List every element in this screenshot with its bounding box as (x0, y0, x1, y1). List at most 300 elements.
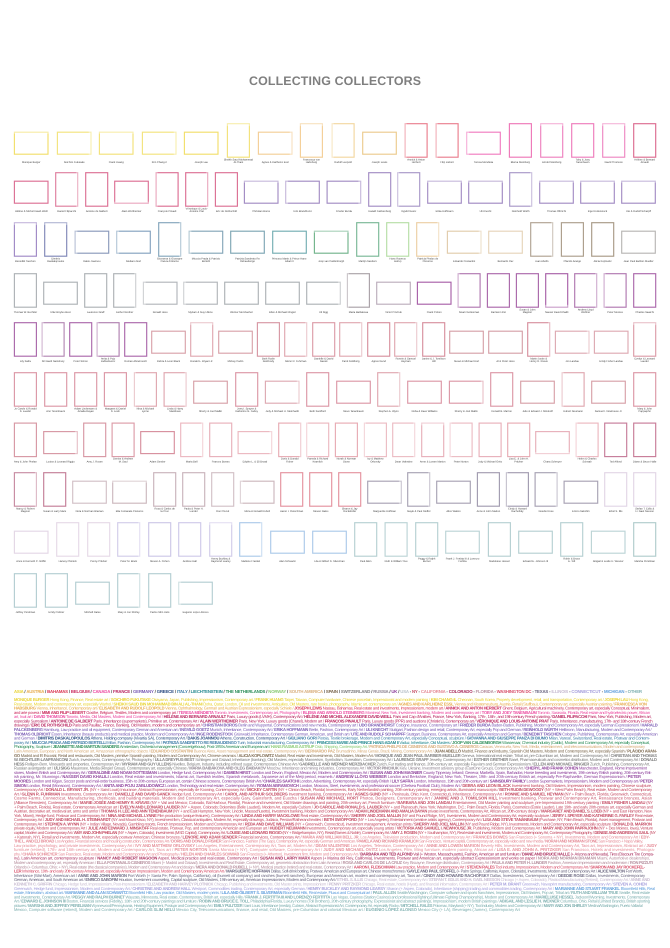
frame: Erika Hoffmann (428, 181, 461, 213)
frame: Thomas W. Bechtler: Thomas W. Bechtler (14, 311, 37, 314)
frame: Evelyn and Leonard Lauder: Evelyn & Leonard (634, 357, 655, 360)
frame: Emily Fisher Landau (594, 331, 628, 363)
frame: Steve Tananbaum (337, 381, 370, 413)
frame: Nora and Norman Braman: Nora & Norman Braman (76, 510, 104, 513)
frame: Susan and Larry Marx (43, 473, 67, 513)
frame: Marsha Perelman (634, 523, 656, 563)
frame: Lily Safra: Lily Safra (20, 360, 31, 363)
row 3 of collector frames (14, 223, 655, 263)
frame: Patrizia Sandretto Re Rebaudengo: Patrizia Sandretto Re (235, 257, 260, 260)
frame: Deedie Rose: Deedie Rose (539, 510, 554, 513)
frame: Peter M. Brant (118, 523, 140, 563)
frame: Susan and John Magnier (516, 274, 538, 314)
frame: Rosa and Carlos de la Cruz: Rosa & Carlos de (155, 507, 175, 510)
frame: Amy and John Phelan (14, 423, 37, 463)
frame: Edward E. Johnson III: Edward E. Johnson III (523, 560, 548, 563)
frame: David Thomson: David Thomson (605, 161, 623, 164)
frame: Panza di Biumo: Giovanna & Giuseppe (157, 257, 183, 260)
frame: Glenn R. Fuhrman: Glenn R. Fuhrman (285, 360, 307, 363)
frame: Norah and Norman Stone: Norah & Norman (337, 458, 357, 461)
row 4 of collector frames (14, 274, 656, 314)
text block: collector directory: Modern and contemporary art, especially American / ELLA FONTANALS-CISNEROS Miami (+ Madrid and Gstaad), Investments and Real Estate, Contemporary art, geometric abstraction from Latin America / ROSA AND CARLOS DE LA CRUZ Key Biscayne, Beverage distribution, Contemporary Art / PAULA AND PETER H. LUNDER Fashion, American Impressionism and modernism / RON PIZZUTI (14, 860, 653, 865)
frame: Ann Tenenbaum: Ann Tenenbaum (46, 410, 65, 413)
text block: collector directory: Orlando (+ Columbus, Ohio; + NY), Real estate (the classical companies), Modern and Contemporary Art and design / MERA AND DONALD RUBELL (+ NY), Medical practice (retired) and real estate, Contemporary Art / AARON I. FLEISCHMAN Law practice, Modern and Contemporary Art / STEVEN RALES Tool industry, Impressionism, Modern and Contemporary Art / SHARON AND JAY ROCKEFEL- (14, 864, 646, 869)
frame: Amy and John Phelan: Amy & John Phelan (14, 460, 37, 463)
frame: Mera and Donald Rubell (240, 481, 274, 513)
frame: Danielle and David Ganek: Ganek (320, 360, 328, 363)
frame: Joseph Lau: Joseph Lau (194, 161, 208, 164)
frame: Nasser David Khalili: Nasser David Khalili (545, 311, 569, 314)
frame: Donald Hess: Donald Hess (153, 311, 168, 314)
text block: collector directory: ish painting, Mr. Munnings / NASSER DAVID KHALILI London, Real estate and investments, Islamic art, Swedish textiles, Spanish metalwork, Japanese art of the Meiji period, enamels / ANDREW LLOYD WEBBER London and Berkshire, England; New York, Theater, 19th- and 20th-century British art, especially Pre-Raphaelite, German Expressionism / PETER (14, 774, 641, 779)
frame: Maria Bell: Maria Bell (186, 460, 198, 463)
frame: Juan Abello: Juan Abelló (535, 260, 549, 263)
frame: Stefan T. Edlis and H. Gael Neeson (634, 473, 656, 513)
frame: Alain Wertheimer (115, 181, 148, 213)
frame: Francois Pinault: François Pinault (158, 210, 177, 213)
frame: Ann Tenenbaum (45, 373, 67, 413)
text block: collector directory: MOORES London and Kilgan, Soccer pools and mail-order business, 15th- to 20th-century European art, certain Chinese screens, Contemporary British Art / CHARLES SAATCHI London, Advertising, Contemporary Art, especially British / LILY SAFRA London, Inheritance, 19th and 20th-century art / SAINSBURY FAMILY London Supermarkets, Impressionism, Modern and Contemporary art / PETER (14, 778, 653, 784)
text block: collector directory: art, Inuit art / DAVID THOMSON Toronto, Media, Old Masters, Modern and Contemporary Art / HÉLÈNE AND BERNARD ARNAULT Paris, Luxury goods (LVMH), Contemporary Art / HÉLÈNE AND MICHEL ALEXANDRE DAVID-WEILL Paris and Cap d'Antibes, France, New York, Banking, 17th-, 18th-, and 19th-century French painting / DANIEL FILIPACCHI Paris, New York, Publishing, Modern art, (14, 714, 652, 719)
frame: Linda and Harry Macklowe (164, 373, 186, 413)
frame: Uli Knecht: Uli Knecht (480, 210, 492, 213)
frame: Ellen and Michael Ringier: Ellen & Michael Ringier (269, 311, 296, 314)
frame: Francesca von Habsburg: Habsburg (306, 161, 318, 164)
frame: Peggy and Ralph Burnet: Peggy & Ralph (418, 557, 436, 560)
frame: Donald Hess (143, 282, 177, 314)
frame: Christian Boros (244, 181, 278, 213)
frame: Denise and Andrew M. Saul: M. Saul (119, 460, 128, 463)
frame: Carol Goldberg (340, 323, 362, 363)
frame: Ted Alfond (605, 423, 627, 463)
frame: Jeannette and Martijn Sanders: Martijn Sanders (359, 260, 377, 263)
frame: Teresa Mendieta (467, 132, 500, 164)
frame: Noam Gottesman: Noam Gottesman (459, 311, 480, 314)
text block: collector directory: Latin American, European, and North American art, Amazonian ethnographic objects / EDUARDO COSTANTINI Buenos Aires, Asset management and real estate, Contemporary Art / BERNARDO PAZ Brumadinho, Minas Gerais, Brazil, Mining, Contemporary Art / JUAN ABELLÓ Madrid, Finance and industry, Spanish Old Masters, Modern and Contemporary Art, especially Spanish / PLÁCIDO ARAN- (14, 748, 658, 754)
frame: Cindy and Howard Rachofsky (506, 473, 528, 513)
frame: Marguerite Hoffman: Marguerite Hoffman (373, 510, 396, 513)
frame: Udo Brandhorst (286, 181, 319, 213)
text block: collector directory: York, Miami), Hedge fund, Postwar and Contemporary Art / NINA AND MICHAEL LYNNE Film production (unique features), Contemporary Art / LINDA AND HARRY MACKLOWE Real estate, Contemporary Art / SHERRY AND JOEL MALLIN (NY and Pound Ridge, NY), Investments, Modern and Contemporary Art, especially sculpture / JERRY I. SPEYER AND KATHERINE G. FARLEY Real estate, (14, 813, 654, 818)
text block: collector directory: (Alliance Bernstein), Contemporary Art / MARIE-JOSÉE AND HENRY R. KRAVIS (NY + Vail and Mexico; Colorado, Bal Harbour, Florida), Finance and investment, Old Master drawings and painting, 20th-century art, French furniture / BARBARA AND JON LANDAU Entertainment, Old Master painting and sculpture, pre-Impressionist 19th-century painting / EMILY FISHER LANDAU (NY (14, 800, 653, 805)
frame: Jeffrey Perelman (14, 574, 36, 614)
frame: Dean Valentine (393, 423, 415, 463)
frame: Lisa E. and John A. Pritzker: Pritzker (514, 460, 523, 463)
frame: Paula and Peter H. Lunder: Paula & Peter H. (184, 507, 204, 510)
text block: collector directory: + Katonah, NY), Retail and investments, Modern Art, especially postwar American; Chinese bronzes / LENORE AND ADAM SENDER Financial services, Contemporary Art / MARIA AND WILLIAM BELL JR. Los Angeles, Television production, Modern and Contemporary Art / FRANCES BOWES San Francisco (+ Sonoma + NY), Investments, Modern and Contemporary Art / EDY- (14, 834, 651, 839)
frame: Nora and Norman Braman (73, 481, 106, 513)
frame: Deedie Rose (535, 473, 557, 513)
frame: Stephen A. Wynn: Stephen A. Wynn (379, 410, 399, 413)
frame: William Mackie and Raymond Learsy (210, 523, 232, 563)
text block: collector directory: furniture (retired), 17th- and 18th-century art, Modern and Contemporary Art, Taos art / PETER NORTON Santa Monica (+ NY), Computer software, Contemporary Art / JUDY AND MICHAEL OVITZ Los Angeles, Film, Ming furniture, modern painting, African art / LISA E. AND JOHN A. PRITZKER San Francisco, Hotels and investments, Photogra- (14, 847, 656, 852)
frame: Louise and Leonard Riggio (44, 432, 77, 463)
frame: Patricia Phelps de Cisneros (417, 223, 439, 263)
frame: Emily Pulitzer: Emily Pulitzer (49, 611, 64, 614)
frame: Margaret and Daniel S. Loeb: S. Loeb (111, 410, 120, 413)
frame: Chara Schreyer: Chara Schreyer (543, 460, 562, 463)
frame: Rudolf Leopold (332, 124, 354, 164)
frame: Ella Fontanals-Cisneros (113, 481, 146, 513)
frame: Jo Carole and Ronald S. Lauder: S. Lauder (20, 410, 31, 413)
frame: Cindy and Howard Rachofsky: Rachofsky (511, 510, 524, 513)
text block: collector directory: Photography, Sculpture / JEANNETTE AND MARTIJN SANDERS Amsterdam, Orchestra management (Concertgebouw), Post-1950s American and European art / HANS RASMUS ASTRUP Oslo, Shipping, Contemporary Art / PATRICIA PHELPS DE CISNEROS AND GUSTAVO A. CISNEROS Caracas, Venezuela, New York, Media, entertainment, and telecommunications, Modern and contemporary (14, 744, 646, 749)
frame: Al and Peter Hess (489, 331, 522, 363)
text block: collector directory: LER Inheritance, 19th- and early 20th-century American art, especially American Impressionism, Modern and Contemporary American Art / MARGUERITE HOFFMAN Dallas, Soft-drink bottling, Postwar, American and European art, Chinese monochromes / GAYLE AND PAUL STOFFEL (+ Palm Springs, California; Aspen, Colorado), Investments, Modern and Contemporary Art / ALICE WALTON Fort Worth, (14, 869, 643, 874)
frame: Eduardo Costantini: Eduardo Costantini (453, 260, 476, 263)
frame: Alice Walton (437, 481, 470, 513)
frame: Miuccia Prada and Patrizio Bertelli: Bertelli (202, 260, 210, 263)
frame: Patricia Phelps de Cisneros: Cisneros (423, 260, 434, 263)
frame: Uli Sigg: Uli Sigg (319, 311, 329, 314)
text block: collector directory: private equity, Modern and Contemporary Art / JULIE AND EDWARD J. MINSKOFF Real estate, Postwar, Pop, and contemporary American and European art / HUBERT NEUMANN Investments, Contemporary art, especially young artists / VICTORIA AND SAMUEL I. NEWHOUSE JR. Publishing, Modern and Contemporary Art / MARY AND JOHN PAPPAJOHN (NY + Des Moines, Iowa), Venture (14, 826, 654, 831)
frame: Benedikt Taschen (14, 223, 36, 263)
frame: Juan Abello (531, 223, 553, 263)
frame: Thomas Olbricht: Thomas Olbricht (547, 210, 566, 213)
frame: Thomas W. Bechtler (14, 274, 37, 314)
frame: Marie-Josee and Henry R. Kravis: Henry R. Kravis (530, 360, 548, 363)
frame: Stephen A. Wynn (378, 373, 400, 413)
frame: Joseph Lewis (363, 132, 396, 164)
frame: Frances Bowes: Frances Bowes (212, 460, 230, 463)
frame: Sherry and Joel Mallin (449, 381, 483, 413)
frame: Ute and Rudolf Scharpff (622, 181, 655, 213)
frame: Nancy and Robert Magoon: Nancy & Robert (16, 507, 35, 510)
frame: Mary and John Pappajohn (634, 373, 656, 413)
frame: Adam Lindemann and Amalia Dayan: Amalia Dayan (78, 410, 94, 413)
frame: Jean Paul Barbier-Mueller (622, 231, 655, 263)
frame: Cindy and Howard Rachofsky: Cindy & Howard (508, 507, 527, 510)
frame: Harald Falckenberg (368, 173, 392, 213)
frame: Antoine de Galbert (86, 173, 108, 213)
frame: Jeannette and Martijn Sanders (357, 223, 379, 263)
frame: Donald B. Marron (491, 373, 513, 413)
frame: Myriam and Guy Ullens: Myriam & Guy Ullens (188, 311, 213, 314)
text block: collector directory: Art / EDWARD E. JOHNSON III Boston, Financial services (Fidelity), 18th- and 20th-century paintings and furniture / ROBIN AND BRUCE E. TOLL Philadelphia/Florida, Luxury homes (Toll Brothers), 20th-century photography, Expressionist and abstract paintings, Impressionism, modern British paintings / ABIGAIL AND LESLIE H. WEXNER Columbus, Ohio, Retail (Limited Brands), British sporting (14, 899, 651, 904)
frame: Amy J. Rosen (84, 423, 106, 463)
frame: Judy and Michael Ovitz (478, 423, 503, 463)
frame: Debra and Leon Black: Debra & Leon Black (157, 360, 181, 363)
frame: Dakis Joannou: Dakis Joannou (83, 260, 101, 263)
frame: Uli Sigg (307, 282, 340, 314)
frame: Blema Steinberg: Blema Steinberg (511, 161, 531, 164)
frame: Lila and Gilbert S. Silverman: Lila & Gilbert S. Silverman (314, 560, 345, 563)
frame: Penny Pritzker: Penny Pritzker (90, 560, 107, 563)
frame: Blema Steinberg (509, 124, 531, 164)
frame: Jerry I. Speyer and Katherine G. Farley: Katherine G. Farley (235, 410, 259, 413)
frame: Marie-Josee and Henry R. Kravis: Marie-Josée & (530, 357, 547, 360)
frame: Peter Norton (450, 423, 472, 463)
frame: Nancy and Robert Magoon: Magoon (21, 510, 31, 513)
frame: Alan Schwartz: Alan Schwartz (279, 560, 296, 563)
frame: Veronique and Louis-Antoine Prat: Antoine Prat (190, 210, 204, 213)
frame: Peggy and Ralph Burnet: Burnet (423, 560, 431, 563)
frame: Alain Wertheimer: Alain Wertheimer (122, 210, 142, 213)
frame: Princess Marie and Prince Hans-Adam II (272, 231, 307, 263)
frame: Ella Fontanals-Cisneros: Ella Fontanals-Cisneros (116, 510, 144, 513)
frame: Mitchell Rales: Mitchell Rales (84, 611, 101, 614)
frame: Judy and Michael Ovitz: Judy & Michael Ovitz (478, 460, 503, 463)
frame: Anne and Lowen Marion (420, 423, 446, 463)
frame: Peter Moores: Peter Moores (607, 311, 624, 314)
text block: collector directory: FALCKENBERG Hamburg, Law practice and oil equipment, Contemporary German and American art / INGVILD GOETZ Munich, Inheritance, Contemporary Art / ERIKA HOFFMANN Berlin, Fashion, Contemporary Art / ULI KNECHT Stuttgart, Fashion design and retail, Contemporary Art, especially Pop and German / REINHOLD WÜRTH Heilbronn, Manufacturing, Modern and Contemporary Art / (14, 727, 653, 732)
frame: Mera and Donald Rubell: Mera & Donald Rubell (245, 510, 270, 513)
text block: collector directory: porary Art / MIUCCIA PRADA AND PATRIZIO BERTELLI Milan, Fashion, Contemporary Art / PATRIZIA SANDRETTO RE REBAUDENGO Turin, Industrial manufacturing, Contemporary Art / PRINCESS MARIE AND PRINCE HANS-ADAM II Vaduz, Inheritance, Old Masters / JOOP VAN CALDENBORGH Wassenaar, Chemical industry (Caldic), Modern and Contemporary Art, especially Conceptual, (14, 740, 650, 745)
text block: collector directory: THE L. AND ELI BROAD Los Angeles, Financial services and housing construction, Contemporary Art / DORIS AND DONALD FISHER San Francisco, Fashion (The Gap), Contemporary Art, especially German and American / PAMELA AND RICHARD KRAMLICH San Francisco, Venture capital, Contemporary art, especially video and new media / NORAH AND NORMAN STONE San Francisco + Napa Valley, (14, 839, 643, 844)
text block: collector directory: KENNETH C. GRIFFIN Chicago, Hedge fund, Impressionism, Post-Impressionism / ELIZABETH AND HARVEY PLOTNICK Chicago, Publishing and investments, Old Master prints, Impressionism / PENNY PRITZKER Chicago, Real estate, hotels (Hyatt), and financial information, Contemporary Art / PETER M. BRANT Greenwich, Newsprint manufacturing, Contemporary Art / STEVEN A. COHEN (14, 882, 647, 886)
frame: Joop van Caldenborgh (314, 231, 348, 263)
frame: Denise and Andrew M. Saul: Denise & Andrew (113, 458, 133, 461)
frame: Jon Landau (555, 331, 589, 363)
frame: William Mackie and Raymond Learsy: Raymond Learsy (211, 560, 231, 563)
frame: Doris and Donald Fisher: Fisher (286, 460, 293, 463)
frame: Laurence Graff (85, 274, 107, 314)
frame: Peter Moores (604, 274, 626, 314)
frame: Erika Hoffmann: Erika Hoffmann (436, 210, 454, 213)
frame: Reba and Dave Williams (408, 381, 441, 413)
frame: Edythe L. and Eli Broad (238, 432, 272, 463)
frame: Judy and Michael H. Steinhardt: Judy & Michael H. Steinhardt (265, 410, 299, 413)
frame: Ted Alfond: Ted Alfond (610, 460, 622, 463)
frame: Dimitris Daskalopoulos: Daskalopoulos (47, 260, 65, 263)
frame: Eduardo Costantini (447, 231, 481, 263)
frame: Miuccia Prada and Patrizio Bertelli (189, 231, 223, 263)
frame: Sheikh Saud (224, 124, 254, 164)
frame: Teresa Mendieta: Teresa Mendieta (474, 161, 494, 164)
frame: Esther Grether (114, 274, 136, 314)
frame: Danielle and David Ganek: Danielle & David (314, 357, 334, 360)
frame: Toby and Joey Tanenbaum (572, 124, 594, 164)
frame: Robin and Bruce E. Toll (561, 523, 583, 563)
frame: Danielle and David Ganek (313, 323, 335, 363)
text block: collector directory: HESS Rolligen-Bern, Vineyards and properties, Contemporary Art / MYRIAM AND GUY ULLENS Nivelles, Belgium, Industry, including refined sugar, Contemporary Chinese Art / GABRIELLE AND WERNER MERZBACHER Zurich, Fur trading and finance, 20th-century art, especially Fauvism and German Expressionism / ELLEN AND MICHAEL RINGIER Zurich, Publishing, Contemporary Art, (14, 761, 650, 766)
frame: Princess Marie and Prince Hans-Adam II: Princess Marie & Prince Hans- (272, 257, 307, 260)
frame: Ivy and Matthew Orlovsky: Ivy & Matthew (367, 458, 384, 461)
frame: Placido Arango (561, 223, 583, 263)
frame: Joseph Lewis: Joseph Lewis (372, 161, 388, 164)
frame: Debra and Leon Black (152, 331, 185, 363)
text block: collector directory: THOMAS OLBRICHT Essen, Inheritance (beauty products) and medical practice, Modern and Contemporary Art / INGE RODENSTOCK Grünwald, Inheritance, Contemporary German, American, and British art / UTE AND RUDOLF SCHARPFF Stuttgart, Business, Contemporary Art, especially American and German / BENEDIKT TASCHEN Cologne, Publishing, Contemporary Art, especially American (14, 731, 658, 736)
frame: Daniel Filipacchi: Daniel Filipacchi (57, 210, 77, 213)
frame: Frieder Burda (327, 181, 361, 213)
frame: Helene and Bernard Arnault: Arnault (641, 161, 649, 164)
frame: Anne and Kenneth C. Griffin: Anne & Kenneth C. Griffin (16, 560, 47, 563)
frame: Jerry I. Speyer and Katherine G. Farley (235, 373, 259, 413)
frame: Andrew Hall: Andrew Hall (183, 560, 197, 563)
frame: Adam Sender (141, 432, 174, 463)
frame: Dean Valentine: Dean Valentine (395, 460, 413, 463)
frame: Damien Hirst (487, 274, 509, 314)
frame: Judy and Michael H. Steinhardt (265, 381, 299, 413)
text block: collector directory: HABSBURG Vienna, Inheritance, Contemporary art / ELISABETH AND RUDOLF LEOPOLD Vienna, Ophthalmology, German and Austrian Expressionism, especially Schiele / JOSEPH LEWIS Nassau, Bahamas, Real estate and investments, Impressionism, modern art / ANNICK AND ANTON HERBERT Ghent, Belgium, Agricultural machinery, Contemporary art, especially Conceptual, Minimalism, (14, 706, 650, 711)
text block: collector directory: stores, Modern British and Contemporary Art / GERALDINE AND NOAM GOTTESMAN London, Hedge fund, Contemporary Art / DAMIEN HIRST London and Devon, England, Mexico Art, Modern and Contemporary Art / SUSAN AND JOHN MAGNIER County Tipperary, Ireland; Geneva; Marbella, Spain, Barbados; Horse breeding and investments, 19th-century British painting, 20th-century Brit- (14, 770, 652, 775)
frame: Mary and John Pappajohn: Pappajohn (638, 410, 651, 413)
frame: Marsha Perelman: Marsha Perelman (634, 560, 655, 563)
frame: David-Weill (14, 181, 48, 213)
frame: Edward E. Johnson III (519, 531, 552, 563)
frame: Sheikh Saud: Al-Thani (234, 161, 244, 164)
frame: Beth Rudin DeWoody: DeWoody (263, 360, 275, 363)
frame: David-Weill: Hélène & Michel David-Weill (15, 210, 48, 213)
frame: Paula and Peter H. Lunder: Lunder (190, 510, 198, 513)
frame: Steven Rales: Steven Rales (313, 510, 329, 513)
frame: Julie and Edward J. Minskoff (521, 381, 554, 413)
frame: Jerry I. Speyer and Katherine G. Farley: Jerry I. Speyer & (237, 407, 257, 410)
frame: Sherry and Joel Mallin: Sherry & Joel Mallin (455, 410, 478, 413)
frame: Francesca von Habsburg: Francesca von (303, 158, 320, 161)
frame: Ulla Dreyfus-Best (44, 282, 77, 314)
frame: Patrizia Sandretto Re Rebaudengo: Rebaudengo (240, 260, 255, 263)
frame: Dimitris Daskalopoulos: Dimitris (51, 257, 61, 260)
frame: Agnes Gund: Agnes Gund (371, 360, 386, 363)
frame: Inge Rodenstock (581, 181, 614, 213)
frame: Doris and Donald Fisher (279, 423, 301, 463)
frame: Sharon and Jay Rockefeller (339, 473, 361, 513)
frame: Janine and J. Tomilson Hill (422, 323, 446, 363)
frame: William Mackie and Raymond Learsy: Henry Buckley & (211, 557, 231, 560)
frame: Carlos Slim Helu (149, 574, 171, 614)
frame: Esther Grether: Esther Grether (116, 311, 133, 314)
frame: Laurence Graff: Laurence Graff (87, 311, 105, 314)
frame: Udo Brandhorst: Udo Brandhorst (293, 210, 312, 213)
frame: Anita and Poju Zabludowicz (97, 323, 119, 363)
frame: Enrico Sabofim (564, 481, 598, 513)
frame: Margaret and Daniel S. Loeb: Margaret & Daniel (105, 407, 126, 410)
frame: Rosa and Carlos de la Cruz (154, 473, 176, 513)
frame: Arnold Steinberg (541, 124, 563, 164)
frame: Filip Liebert (436, 124, 458, 164)
frame: Andrew Hall (179, 523, 201, 563)
frame: Anne and Kenneth C. Griffin (14, 531, 48, 563)
frame: Joseph Lau (184, 132, 218, 164)
frame: Nasser David Khalili (545, 274, 569, 314)
frame: Ingvild Goetz (398, 173, 420, 213)
frame: Harvey Plotnick: Harvey Plotnick (59, 560, 77, 563)
frame: Frieder Burda: Frieder Burda (336, 210, 352, 213)
row 10 of collector frames (14, 574, 212, 614)
frame: Beth Swofford: Beth Swofford (310, 410, 326, 413)
frame: Noam Gottesman (458, 274, 480, 314)
frame: Christian Boros: Christian Boros (252, 210, 271, 213)
frame: Chara Schreyer (536, 432, 569, 463)
frame: Alice Walton: Alice Walton (446, 510, 461, 513)
frame: Steve Tananbaum: Steve Tananbaum (343, 410, 364, 413)
frame: Adam Lindemann and Amalia Dayan (74, 373, 97, 413)
frame: Werner Merzbacher: Werner Merzbacher (230, 311, 253, 314)
frame: Donald L. Bryant Jr. (190, 323, 213, 363)
frame: Alicia Koplowitz: Alicia Koplowitz (594, 260, 612, 263)
frame: Sherry and Joel Mallin: Sherry & Joel Mallin (199, 410, 223, 413)
frame: Alicia Koplowitz (592, 223, 614, 263)
frame: Soichiro Fukutake (57, 132, 91, 164)
frame: Jo Carole and Ronald S. Lauder (14, 373, 37, 413)
frame: Diane and Bruce Halle (633, 423, 657, 463)
frame: Helen and Charles Schwab (576, 423, 598, 463)
text block: collector directory: drawings / ERIC DE ROTHSCHILD Paris and Pauillac, France, Banking, Old Masters, modern and contemporary art / CHRISTIAN BOROS Berlin and Wuppertal, Communications and new media, Contemporary art / UDO BRANDHORST Cologne, Insurance, Contemporary art / FRIEDER BURDA Baden-Baden, Publishing, Modern and Contemporary Art, especially German Expressionism / HARALD (14, 723, 658, 728)
frame: Marieluise Hessel: Marieluise Hessel (489, 560, 510, 563)
frame: Janine and J. Tomilson Hill: Hill (432, 360, 436, 363)
frame: Veronique and Louis-Antoine Prat: Véronique & Louis- (186, 207, 208, 210)
frame: Arnold Steinberg: Arnold Steinberg (542, 161, 562, 164)
frame: Peter Simon (70, 323, 92, 363)
text block: collector directory: Contemporary Art / STEPHEN A. WYNN (NY + Indian Village, Nevada), Gambling resorts, French Impressionism, Modern and Contemporary Art / REBA AND DAVE WILLIAMS (NY + Greenwich, Connecticut), investment management, American prints / SHERRY AND JOEL MALLIN (NY and Pound Ridge, NY), Investments, Modern and Contemporary Art, especially sculpture / DONALD B. MARRON (14, 821, 652, 826)
frame: Ronnie and Samuel Heyman: Ronnie & Samuel (396, 357, 416, 360)
frame: Mickey Cartin (219, 331, 252, 363)
frame: Susan and Michael Hort (450, 331, 483, 363)
text block: collector directory: pictures / MARSHA AND JEFFREY PERELMAN Wynnewood/Pennsylvania, Heating Equipment, Postwar and Contemporary Art / EMILY PULITZER Saint Louis, Inheritance (media), Cubism, Abstract Expressionist Art, Contemporary Art, especially Rocky / MITCHELL RALES Potomac, Maryland (+ NY), Tool industry, Modern and Contemporary Art / MARY AND JON SHIRLEY Medina/Washington, Puerto Vallarta/ (14, 903, 644, 908)
frame: Robin and Bruce E. Toll: E. Toll (568, 560, 576, 563)
frame: Lila and Gilbert S. Silverman (313, 531, 346, 563)
frame: Penny Pritzker (88, 523, 110, 563)
frame: Peter Simon: Peter Simon (74, 360, 88, 363)
frame: Beth Rudin DeWoody (257, 323, 279, 363)
frame: Paul Allen (355, 523, 377, 563)
frame: Roman Abramovich (124, 323, 148, 363)
frame: Abigail and Leslie H. Wexner (591, 531, 625, 563)
frame: Pamela and Richard Kramlich (307, 423, 329, 463)
frame: Ruth and William True: Ruth & William True (385, 560, 408, 563)
frame: Mickey Cartin: Mickey Cartin (228, 360, 244, 363)
frame: Diane and Bruce Halle: Diane & Bruce Halle (633, 460, 657, 463)
text block: collector directory: Law practice, psychology, and private investments, Contemporary Art / IVY AND MATTHEW ORLOVSKY Los Angeles, Entertainment, Contemporary Art, Taos art, Modern Art / DEAN VALENTINE Los Angeles, Television, Contemporary Art / ANNE AND LOWEN MARION Beverly Hills, Investments, Modern and Contemporary Art, Taos art, Impressionism, Abstract art / JUDY (14, 843, 657, 848)
frame: Sherry and Joel Mallin (194, 381, 227, 413)
row 7 of collector frames (14, 423, 657, 463)
frame: Nancy and Robert Magoon (14, 473, 36, 513)
text block: collector directory: Russian avantgarde art / ULI SIGG Mauensee, Media (Ringier Group), Contemporary art, especially Chinese / MARIA BAIBAKOVA AND OLEG BAIBAKOV Moscow, Inheritance and mining industries, Contemporary Art / VICTOR PINCHUK Kiev, Ukraine, Investment advisory group (EastOne Group), Contemporary Art / CHERYL AND FRANK COHEN Manchester, England, Home Improvement (14, 766, 648, 771)
frame: Ronnie and Samuel Heyman (395, 323, 417, 363)
frame: Evelyn and Leonard Lauder (634, 323, 656, 363)
frame: Monique Burger (14, 132, 48, 164)
frame: Ron Pizzuti: Ron Pizzuti (216, 510, 230, 513)
frame: Marianne Frankel: Marlene Frankel (241, 560, 260, 563)
frame: David Thomson (603, 124, 625, 164)
frame: Bernardo Paz: Bernardo Paz (498, 260, 514, 263)
frame: Susan and Larry Marx: Susan & Larry Marx (43, 510, 67, 513)
frame: Beth Swofford (307, 373, 329, 413)
frame: Helen and Charles Schwab: Helen & Charles (578, 458, 597, 461)
frame: Panza di Biumo (157, 223, 183, 263)
frame: Benedikt Taschen: Benedikt Taschen (15, 260, 36, 263)
row 1 of collector frames (14, 124, 656, 164)
frame: Daniel Filipacchi (56, 173, 78, 213)
frame: Steven A. Cohen (149, 523, 171, 563)
frame: Stefan T. Edlis and H. Gael Neeson: H. Gael Neeson (635, 510, 654, 513)
frame: Agnes and Karlheinz Essl: Agnes & Karlheinz Essl (262, 161, 289, 164)
text block: collector directory: and German / DIMITRIS DASKALOPOULOS Athens, Holding company (Vivartia SA), Contemporary Art / DAKIS JOANNOU Athens, Construction, Contemporary Art / GIULIANO GORI Pistoia, Textile brokerage, Modern and Contemporary Art, especially Conceptual, sculpture / GIOVANNA AND GIUSEPPE PANZA DI BIUMO Milan, Varese, Switzerland, Real estate, Postwar and Contem- (14, 736, 651, 741)
text block: collector directory: ny), Latin American art, contemporary sculpture / NANCY AND ROBERT MAGOON Aspen, Medical practice and real estate, Contemporary Art / SUSAN AND LARRY MARX Aspen (+ Marina del Rey, California), Investments, Postwar and American art, especially abstract Expressionism and works on paper / NORA AND NORMAN BRAMAN Miami, Automotive dealerships, (14, 856, 650, 861)
frame: Ron Pizzuti (212, 473, 234, 513)
frame: Agnes Gund (368, 323, 390, 363)
frame: Samuel I. Newhouse Jr.: Samuel I. Newhouse Jr. (595, 410, 622, 413)
frame: Ronnie and Samuel Heyman: Heyman (401, 360, 411, 363)
text block: collector directory: especially Surrealism / ANTOINE DE GALBERT Paris, Inheritance (supermarkets), Primitive art, Contemporary Art / ALAIN WERTHEIMER Paris, New York, Luxury goods (Chanel), Modern art / FRANÇOIS PINAULT Paris, Luxury goods (PPR) and auctions (Christie's), Contemporary art / VÉRONIQUE AND LOUIS-ANTOINE PRAT Paris, Inheritance, manufacturing, 17th- and 18th-century French (14, 718, 653, 724)
frame: Monique Burger: Monique Burger (22, 161, 41, 164)
frame: Stefan T. Edlis and H. Gael Neeson: Stefan T. Edlis & (635, 507, 654, 510)
frame: Amy J. Rosen: Amy J. Rosen (87, 460, 103, 463)
frame: Dimitris Daskalopoulos (45, 223, 67, 263)
frame: Ulla Dreyfus-Best: Ulla Dreyfus-Best (50, 311, 71, 314)
frame: Ingvild Goetz: Ingvild Goetz (401, 210, 417, 213)
frame: Annick and Anton Herbert: Annick & Anton (407, 158, 425, 161)
frame: Ellen and Michael Ringier (266, 282, 299, 314)
frame: Marie-Josee and Henry R. Kravis (528, 323, 550, 363)
frame: Helen and Charles Schwab: Schwab (582, 460, 592, 463)
row 5 of collector frames (14, 323, 656, 363)
frame: Peter M. Brant: Peter M. Brant (120, 560, 137, 563)
frame: Emily Fisher Landau: Emily Fisher Landau (599, 360, 624, 363)
frame: Hubert Neumann (562, 373, 584, 413)
frame: Roman Abramovich: Roman Abramovich (124, 360, 148, 363)
